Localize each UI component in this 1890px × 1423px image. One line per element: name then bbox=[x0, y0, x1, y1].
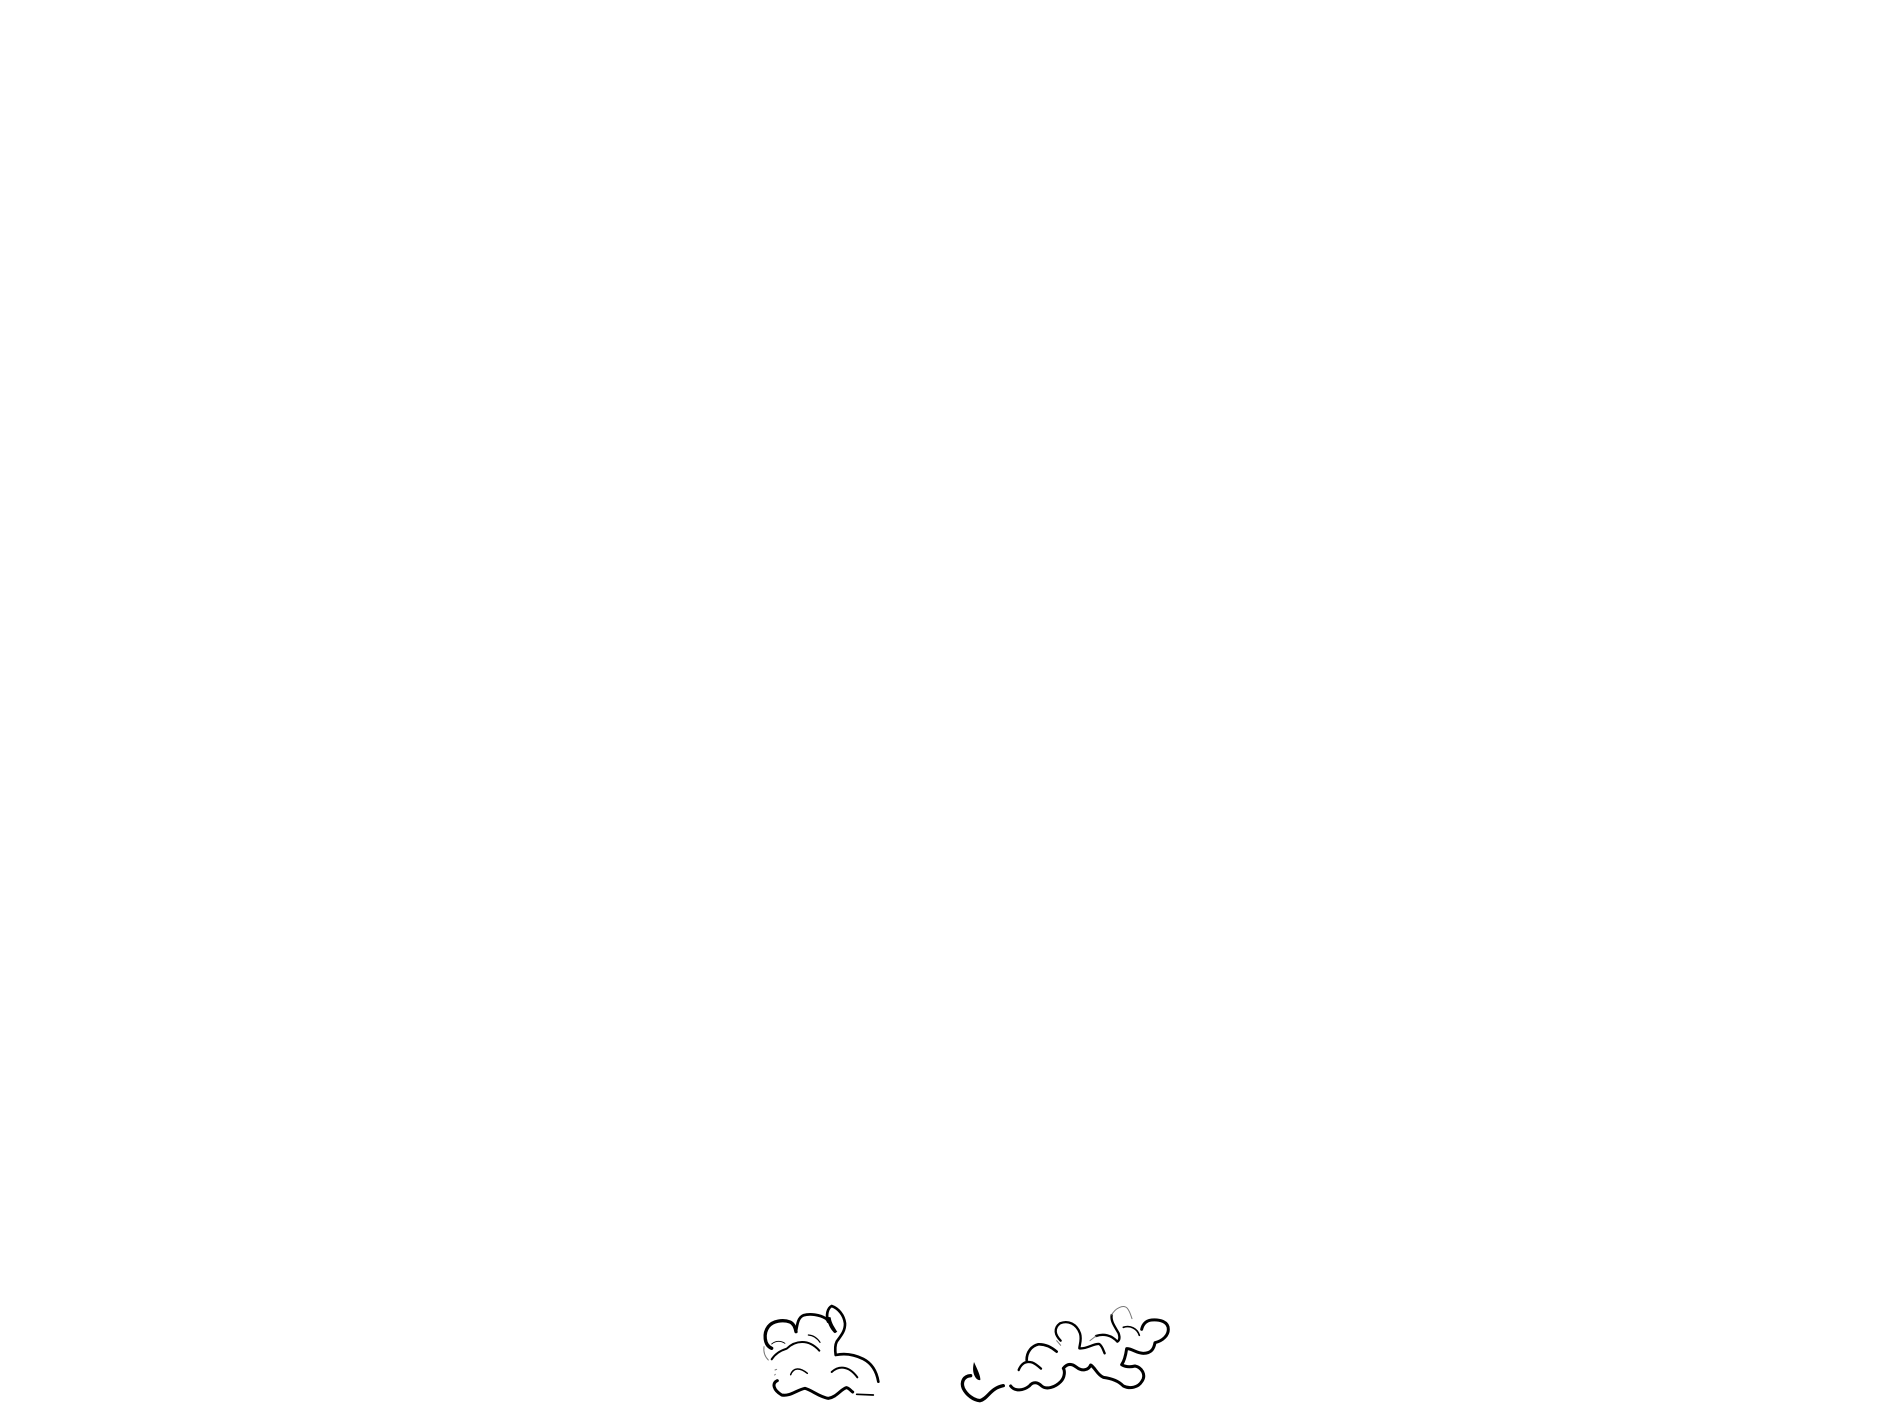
icon: right brush-stroke cloud bbox=[962, 1307, 1168, 1401]
icon: left brush-stroke cloud bbox=[764, 1306, 878, 1398]
